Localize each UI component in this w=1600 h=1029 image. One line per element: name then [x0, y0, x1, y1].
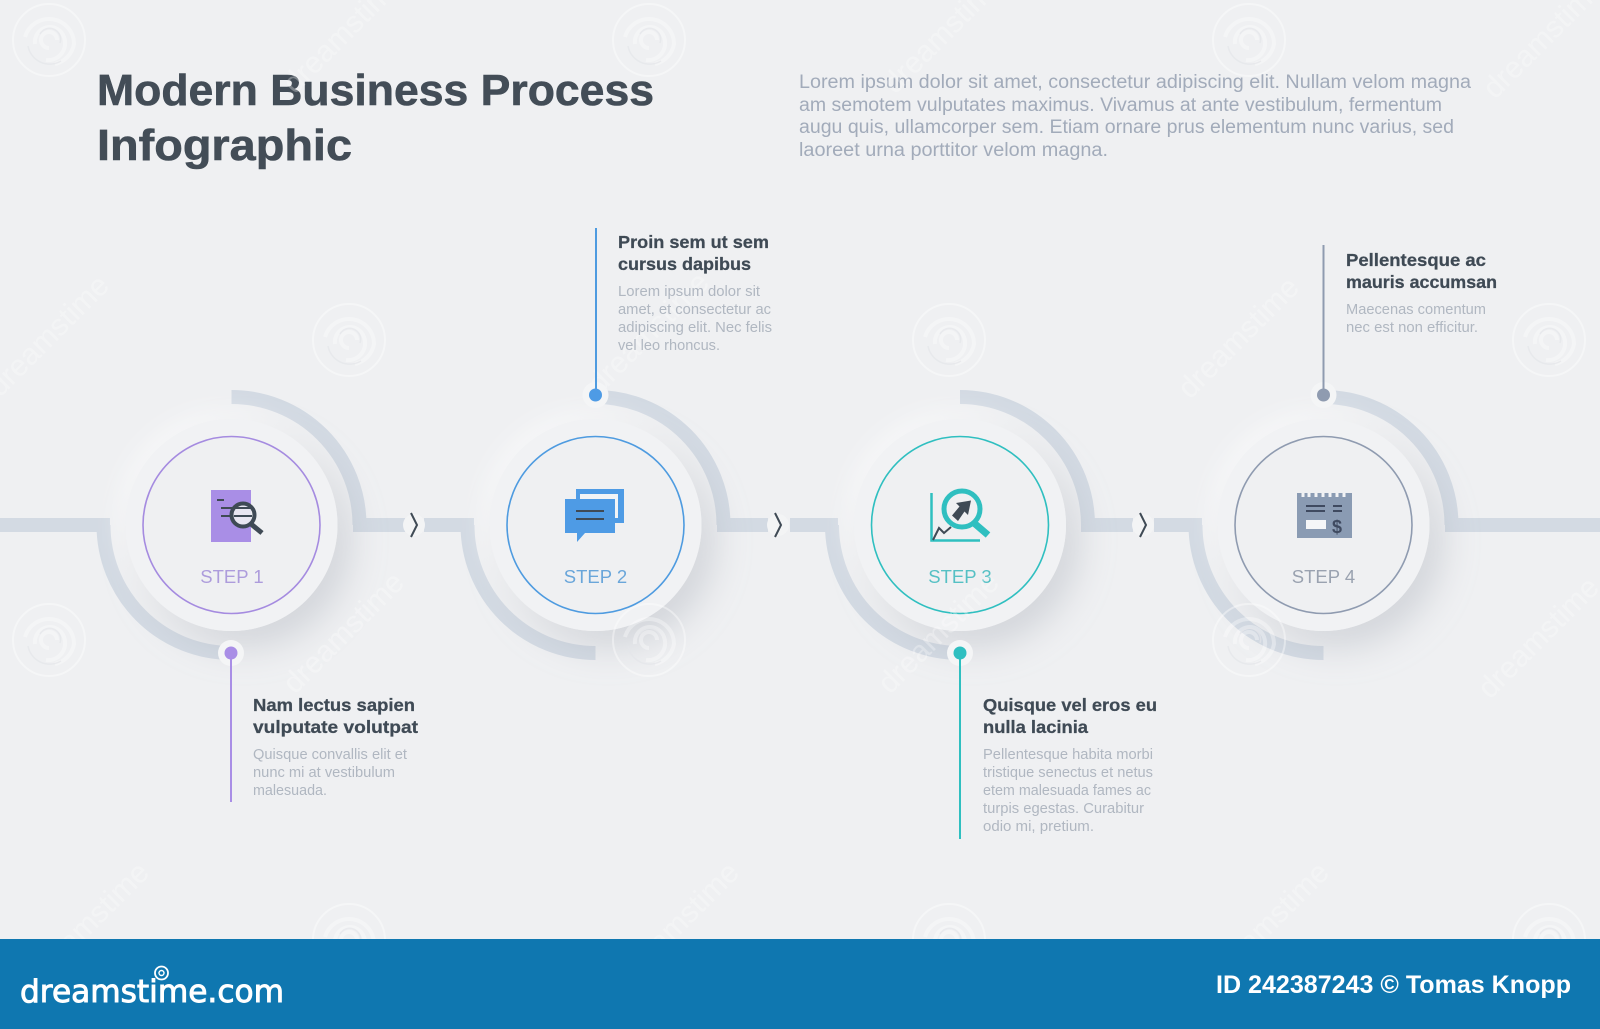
callout: step 2: amet, et consectetur ac: [618, 302, 771, 318]
intro text block: Lorem ipsum dolor sit amet, consectetur adipiscing elit. Nullam velom magna: [799, 72, 1471, 93]
callout: step 1: Quisque convallis elit et: [253, 747, 407, 763]
callout: step 4: Maecenas comentum: [1346, 302, 1486, 318]
callout: step 2: cursus dapibus: [618, 254, 751, 274]
process track: [0, 397, 1600, 653]
title: Modern Business Process: [97, 66, 654, 115]
callout: step 1: nunc mi at vestibulum: [253, 765, 395, 781]
callout: step 3: [947, 640, 1157, 839]
callout: step 1: Nam lectus sapien: [253, 695, 415, 715]
watermark: dreamstime: [582, 266, 716, 400]
label: step 3: STEP 3: [928, 566, 992, 587]
callout: step 4: Pellentesque ac: [1346, 250, 1486, 270]
icon: chat bubbles: [565, 489, 624, 542]
callout: step 4: [1310, 245, 1497, 408]
icon: receipt: $: [1332, 517, 1342, 537]
title: Infographic: [97, 121, 352, 170]
watermark: dreamstime: [277, 566, 411, 700]
step 3 node: [854, 419, 1066, 631]
callout: step 2: [582, 228, 772, 408]
callout: step 2: adipiscing elit. Nec felis: [618, 320, 772, 336]
arrow: step 3 to 4: [1132, 513, 1154, 537]
step 1 node: [126, 419, 338, 631]
watermark: dreamstime: [1202, 856, 1336, 990]
callout: step 1: malesuada.: [253, 783, 327, 799]
icon: receipt: [1297, 493, 1352, 538]
label: step 1: STEP 1: [200, 566, 264, 587]
callout: step 3: tristique senectus et netus: [983, 765, 1153, 781]
label: step 4: STEP 4: [1292, 566, 1355, 587]
title: [97, 66, 654, 170]
watermark: dreamstime: [22, 856, 156, 990]
callout: step 3: etem malesuada fames ac: [983, 783, 1151, 799]
watermark: dreamstime: [612, 856, 746, 990]
callout: step 3: Quisque vel eros eu: [983, 695, 1157, 715]
callout: step 4: mauris accumsan: [1346, 272, 1497, 292]
label: step 2: STEP 2: [564, 566, 627, 587]
intro text block: am semotem vulputates maximus. Vivamus at ante vestibulum, fermentum: [799, 95, 1442, 116]
callout: step 3: turpis egestas. Curabitur: [983, 801, 1144, 817]
callout: step 3: odio mi, pretium.: [983, 819, 1094, 835]
icon: document search: [211, 490, 262, 542]
icon: chart magnifier: [932, 491, 988, 540]
arrow: step 1 to 2: [403, 513, 425, 537]
watermark: dreamstime: [1172, 271, 1306, 405]
footer credit: ID 242387243 © Tomas Knopp: [1216, 971, 1571, 999]
callout: step 3: nulla lacinia: [983, 717, 1088, 737]
callout: step 2: Proin sem ut sem: [618, 232, 769, 252]
step 2 node: [490, 419, 702, 631]
step 4 node: [1218, 419, 1430, 631]
callout: step 2: vel leo rhoncus.: [618, 338, 720, 354]
arrow: step 2 to 3: [767, 513, 789, 537]
intro text block: augu quis, ullamcorper sem. Etiam ornare prus elementum nunc varius, sed: [799, 117, 1454, 138]
intro text block: laoreet urna porttitor velom magna.: [799, 140, 1108, 161]
callout: step 1: [218, 640, 418, 802]
callout: step 2: Lorem ipsum dolor sit: [618, 284, 760, 300]
callout: step 3: Pellentesque habita morbi: [983, 747, 1153, 763]
intro text block: [799, 72, 1471, 161]
callout: step 4: nec est non efficitur.: [1346, 320, 1478, 336]
callout: step 1: vulputate volutpat: [253, 717, 418, 737]
watermark: dreamstime: [872, 566, 1006, 700]
footer banner: [0, 939, 1600, 1029]
footer logo: dreamstime.com: [20, 974, 284, 1010]
